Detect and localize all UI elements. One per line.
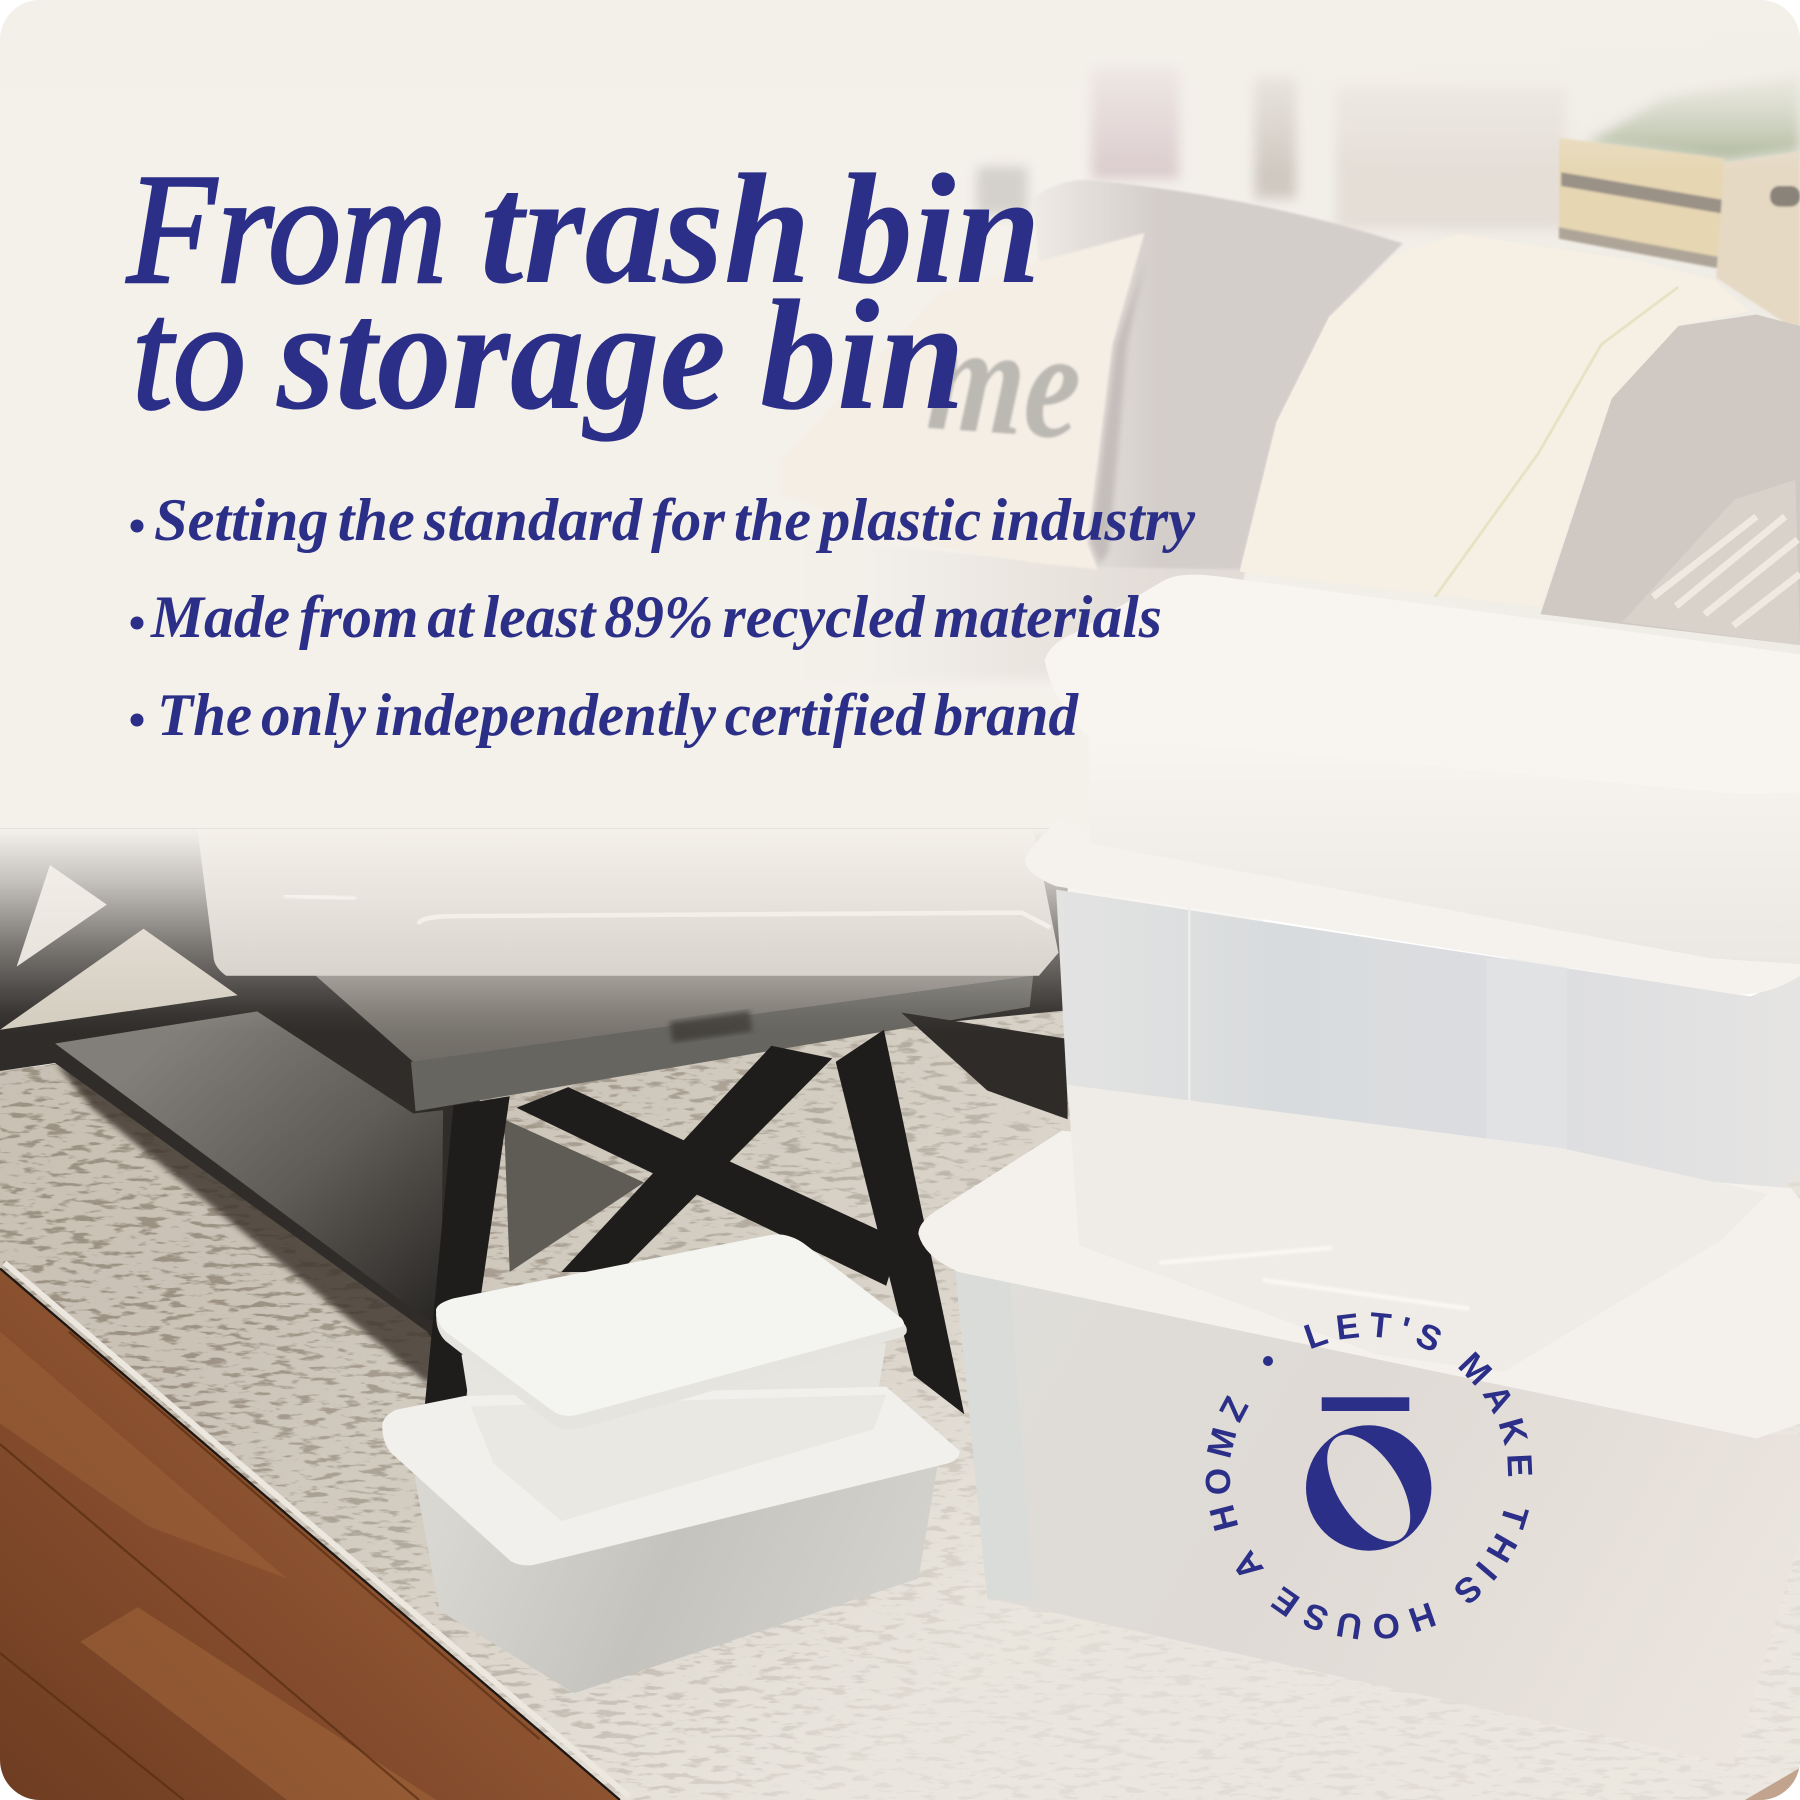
wood floor xyxy=(0,1263,629,1800)
lower shelf xyxy=(55,1011,443,1320)
throw pillow with lettering: me xyxy=(923,290,1086,472)
wall frames and decor xyxy=(977,67,1566,230)
sofa seat xyxy=(988,558,1245,676)
bullet: certified: The only independently certified brand xyxy=(157,682,1079,748)
striped cushion xyxy=(1622,480,1800,645)
rug xyxy=(0,1010,1800,1800)
top wash xyxy=(1090,64,1800,156)
title: bin xyxy=(836,142,1041,317)
medium bin xyxy=(1025,817,1800,1205)
light triangles through frame xyxy=(17,865,107,967)
small bins xyxy=(382,1234,960,1693)
lower small bin body xyxy=(414,1464,938,1693)
table top surface xyxy=(316,976,1033,1062)
large top bin xyxy=(1045,575,1800,964)
legs and cross brace xyxy=(425,1030,964,1414)
translucent tray on table xyxy=(197,829,1058,976)
throw pillow with lettering xyxy=(926,233,1144,569)
blanket draped over sofa xyxy=(1240,286,1680,598)
logo badge xyxy=(1206,1312,1532,1640)
sofa: back, seat and arm xyxy=(981,180,1800,676)
lower small bin lid xyxy=(382,1387,960,1565)
wall backdrop xyxy=(0,0,1800,829)
floor corner bottom right xyxy=(1745,1768,1800,1800)
circular slogan: LET'S MAKE THIS HOUSE A HOMZ xyxy=(1206,1312,1532,1640)
title: From xyxy=(126,142,447,317)
vertical fade over table xyxy=(0,829,1263,1033)
pillow shadow on sofa xyxy=(1089,282,1140,563)
title: bin xyxy=(760,268,965,443)
table edge xyxy=(411,976,1033,1111)
icon: o-macron mark xyxy=(1306,1397,1431,1551)
bullet: standard: Setting the standard for the plastic industry xyxy=(154,487,1195,553)
shelf seen through legs xyxy=(504,1119,644,1272)
coffee table xyxy=(0,829,1068,1414)
large front bin xyxy=(918,1085,1800,1764)
title: to xyxy=(132,268,246,443)
title xyxy=(126,142,1041,443)
upper small bin body xyxy=(462,1343,886,1396)
bullet list xyxy=(130,487,1195,748)
title: trash xyxy=(480,142,811,317)
title: storage xyxy=(276,268,726,443)
plant and crate xyxy=(1559,75,1800,333)
bullet: recycled: Made from at least 89% recycled materials xyxy=(150,584,1162,650)
back frame xyxy=(0,829,1068,1378)
shadow on rug xyxy=(54,1063,432,1386)
right back shadow xyxy=(901,1013,1068,1119)
upper small bin lid xyxy=(436,1237,907,1429)
